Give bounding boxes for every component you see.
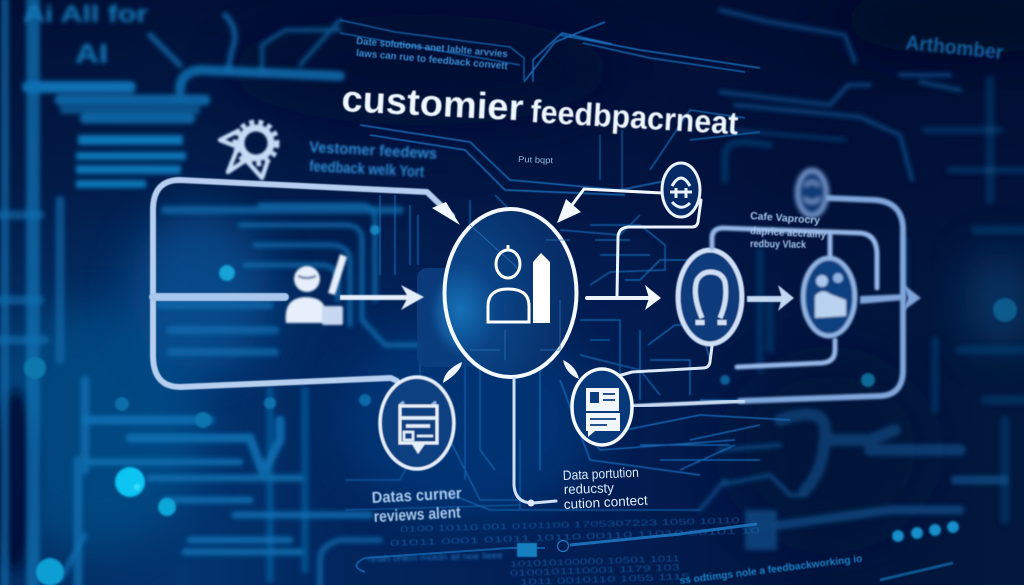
caption: datas curner: Datas curner [371,485,462,507]
text block: customer feedback [309,139,438,181]
icon circle: people [803,258,855,336]
blurred circuit traces right [700,10,1024,550]
binary digit rows [390,515,760,585]
bottom status bar: nnah ohem motdn ail noe lieee [368,550,503,564]
icon: person and bar [488,245,550,323]
icon: person with brush [286,254,347,325]
text block: cafe vaprocry: daprice accrainy [750,225,827,241]
text block: data solutions [356,36,509,72]
main title: feedbpacrneat [530,93,740,141]
arrowhead into hub top-left [432,202,460,225]
sharp circuit traces centre [340,20,790,510]
main hub circle [444,209,576,377]
blurred flow lines right [712,198,903,401]
icon: gear [220,122,277,178]
bottom status bar [356,524,953,585]
arrow from top circle to hub [557,189,662,223]
binary digit rows: 01011 0001 01011 10110 00110 11010 00101 10 [390,525,760,548]
icon circle: support bot [662,163,700,217]
text block: cafe vaprocry: Cafe Vaprocry [750,210,821,227]
central chip panel [417,268,493,367]
glowing dots [24,225,1017,585]
caption: datas curner [371,485,462,526]
caption: data portution: reducsty [564,480,614,497]
main title [341,78,740,141]
text block: data solutions: Date solutions anet lablte arvvies [356,36,509,60]
caption: data portution: Data portution [562,465,639,483]
text block: data solutions: laws can rue to feedback convett [356,48,509,72]
feather arrows to hub [443,360,579,383]
icon circle: document [572,369,632,445]
text block: customer feedback: Vestomer feedews [309,139,438,163]
binary digit rows: 0100 10110 001 0101100 1705307223 1050 10110 [400,515,740,534]
text block: cafe vaprocry: redbuy Vlack [750,238,806,251]
connector lines to arrow right of hub [587,200,712,376]
hub inner traces [470,225,570,360]
main title: customier [341,78,524,129]
chip glow [436,276,488,348]
arrow to second circle [747,285,794,311]
lower long connector [633,401,745,406]
arrow to hub [340,285,424,310]
text block: cafe vaprocry [750,210,827,251]
text block: customer feedback: feedback welk Yort [309,158,425,181]
icon circle: review [380,377,454,469]
blurred heading: Arthomber: Arthomber [904,32,1004,64]
binary digit rows: 101010100000 10501 1011 [510,553,680,569]
main flow lines left loop [153,180,452,387]
caption: data portution [562,465,648,512]
small label: Put bqpt: Put bqpt [518,154,554,165]
icon circle: smile [797,170,827,216]
icon circle: headset [678,250,742,344]
binary digit rows: 0100101110001 1179 103 [510,562,680,578]
blurred circuit traces left [0,0,420,585]
blurred arrow right [860,284,921,311]
blurred text blocks left [60,105,200,188]
blurred heading: All for AI: AI [75,38,108,69]
caption: datas curner: reviews alent [373,504,462,526]
caption: data portution: cution contect [563,493,648,512]
vertical data line with node [514,378,556,506]
blurred heading: All for AI [23,1,148,69]
blurred heading: All for AI: Ai All for [23,1,148,28]
